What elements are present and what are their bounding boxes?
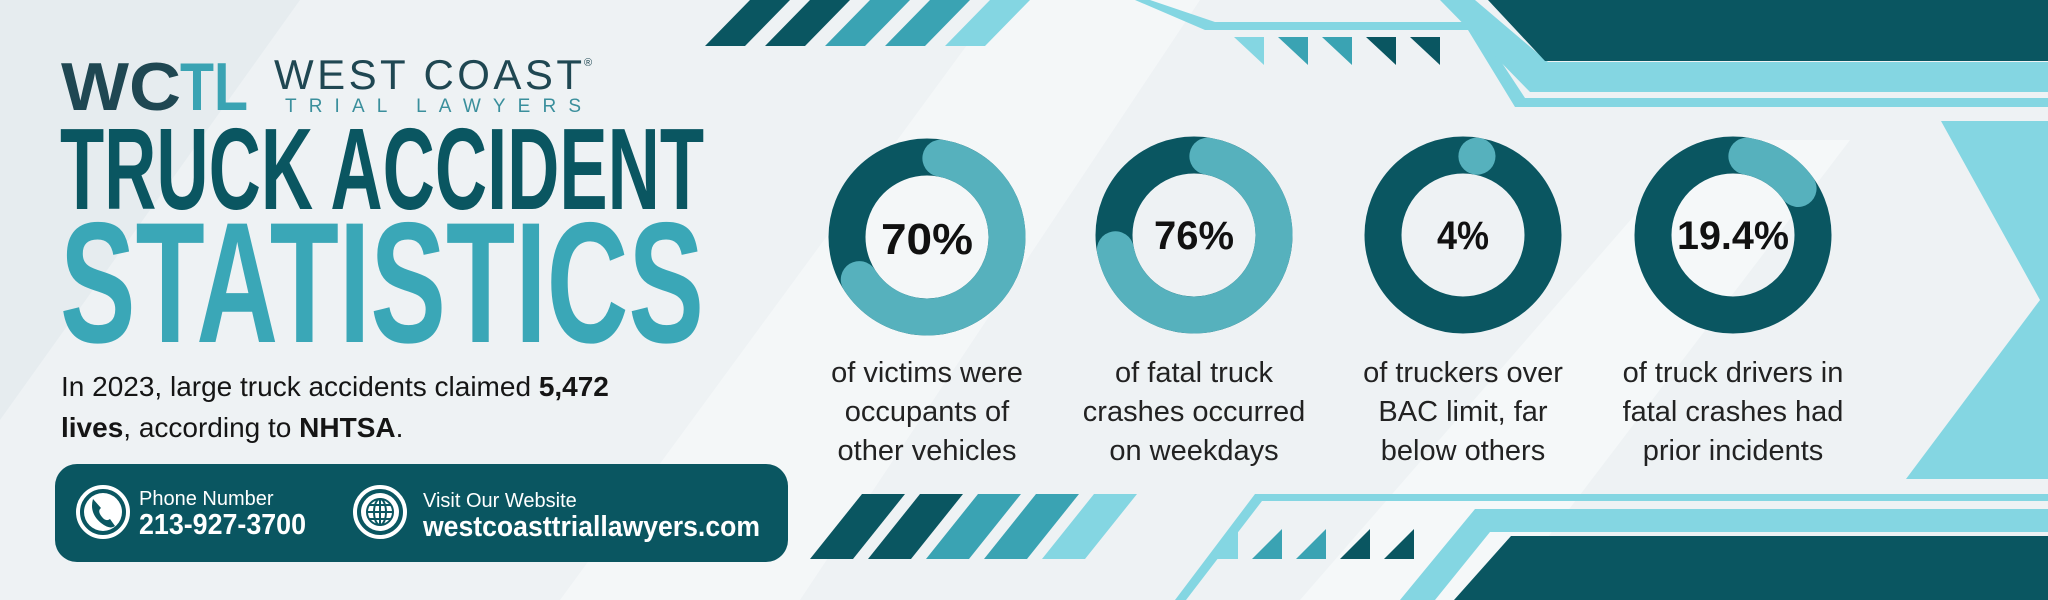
donut: 4%: 4% <box>1437 214 1489 258</box>
label: 76%: crashes occurred <box>1083 396 1305 428</box>
contact bar: Visit Our Website <box>423 490 577 512</box>
contact bar: 213-927-3700 <box>139 509 306 541</box>
decoration: right chevron <box>1906 121 2048 479</box>
logo: WC <box>61 49 181 125</box>
label: 19.4%: of truck drivers in <box>1623 357 1843 389</box>
label: 4%: of truckers over <box>1363 357 1563 389</box>
icon: phone <box>78 487 128 537</box>
label: 70%: other vehicles <box>838 435 1016 467</box>
logo: TRIAL LAWYERS <box>285 96 581 117</box>
subtitle text: lives, according to NHTSA. <box>61 412 403 443</box>
label: 76%: of fatal truck <box>1115 357 1273 389</box>
donut: 4% <box>1370 142 1556 328</box>
logo <box>61 49 592 125</box>
label: 4%: below others <box>1381 435 1545 467</box>
contact bar <box>55 464 788 562</box>
logo: WEST COAST <box>274 51 582 98</box>
title: STATISTICS <box>60 187 704 379</box>
decoration: bottom triangles <box>1208 529 1414 559</box>
donut: 70% <box>834 144 1020 330</box>
donut: 19.4%: 19.4% <box>1677 214 1789 258</box>
label: 76%: on weekdays <box>1109 435 1279 467</box>
donut: 76%: 76% <box>1154 214 1234 258</box>
decoration: top stripes <box>705 0 1030 46</box>
subtitle text: In 2023, large truck accidents claimed 5,472 <box>61 371 609 402</box>
label: 70%: occupants of <box>845 396 1010 428</box>
contact bar: Phone Number <box>139 488 274 510</box>
label: 19.4%: prior incidents <box>1643 435 1823 467</box>
label: 19.4%: fatal crashes had <box>1623 396 1843 428</box>
donut: 70%: 70% <box>881 215 973 264</box>
decoration: bottom stripes <box>810 494 1137 559</box>
decoration: top triangles <box>1234 37 1440 65</box>
contact bar: westcoasttriallawyers.com <box>422 511 760 543</box>
logo: ® <box>584 57 592 69</box>
label: 4%: BAC limit, far <box>1378 396 1548 428</box>
donut: 76% <box>1101 142 1287 328</box>
decoration: top-right bands <box>1135 0 2048 107</box>
donut: 19.4% <box>1640 142 1826 328</box>
title: TRUCK ACCIDENT <box>60 104 704 234</box>
decoration: bottom-right bands <box>1175 494 2048 600</box>
logo: TL <box>180 49 248 125</box>
label: 70%: of victims were <box>831 357 1023 389</box>
title <box>60 104 704 379</box>
icon: globe <box>355 487 405 537</box>
